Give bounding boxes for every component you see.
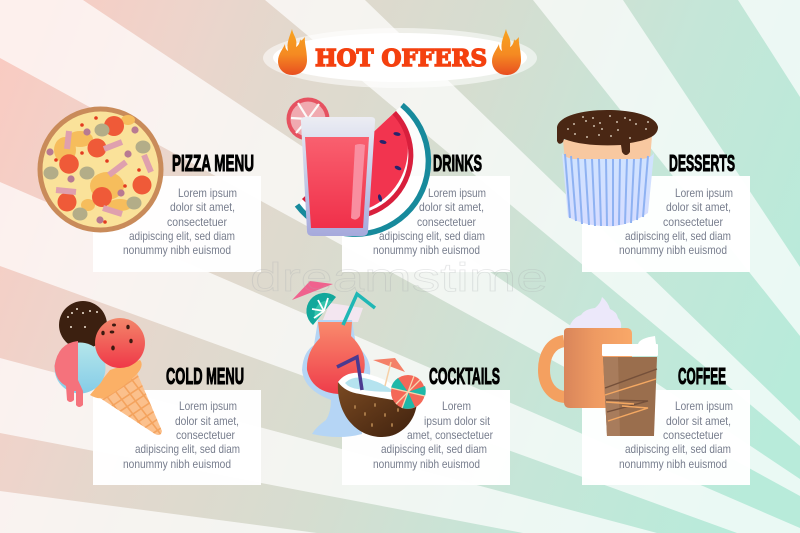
heading: COLD MENU	[166, 363, 244, 389]
icon: citrus slice	[286, 98, 330, 140]
body text: consectetuer	[167, 215, 227, 229]
body text: adipiscing elit, sed diam	[381, 442, 487, 456]
icon: right flame	[492, 29, 521, 75]
heading: DRINKS	[433, 150, 482, 176]
panel: drinks	[286, 98, 510, 272]
paper umbrella	[292, 281, 333, 300]
body text	[619, 399, 733, 471]
heading: COCKTAILS	[429, 363, 500, 389]
body text: Lorem ipsum	[675, 399, 733, 413]
body text: Lorem ipsum	[178, 186, 237, 200]
panel: pizza menu	[38, 106, 261, 272]
body text: dolor sit amet,	[170, 200, 235, 214]
body text: ipsum dolor sit	[424, 414, 491, 428]
icon: watermelon	[297, 105, 428, 234]
body text: nonummy nibh euismod	[619, 243, 727, 257]
heading text: HOT OFFERS	[315, 45, 487, 72]
text card	[582, 390, 750, 485]
body text	[373, 399, 493, 471]
icon: pizza	[38, 106, 164, 232]
icon: cocktail glass	[292, 281, 375, 437]
text card	[342, 390, 510, 485]
heading: COFFEE	[678, 363, 726, 389]
icon: ice cream cone	[54, 301, 162, 435]
text card	[582, 176, 750, 272]
body text: dolor sit amet,	[175, 414, 239, 428]
body text: consectetuer	[663, 428, 723, 442]
icon: glass of juice	[301, 117, 375, 236]
wheel umbrella	[391, 375, 426, 409]
body text	[619, 186, 733, 257]
heading: PIZZA MENU	[172, 150, 254, 176]
panel: coffee	[544, 297, 750, 485]
watermark: dreamstime	[250, 256, 548, 300]
body text: nonummy nibh euismod	[123, 243, 231, 257]
body text: adipiscing elit, sed diam	[129, 229, 235, 243]
body text: Lorem ipsum	[179, 399, 237, 413]
small umbrella	[373, 358, 405, 372]
body text: Lorem ipsum	[428, 186, 486, 200]
body text	[123, 399, 240, 471]
title: hot offers banner	[263, 28, 537, 88]
text card	[93, 176, 261, 272]
body text: consectetuer	[663, 215, 723, 229]
text card	[342, 176, 510, 272]
heading: DESSERTS	[669, 150, 735, 176]
body text: adipiscing elit, sed diam	[379, 229, 485, 243]
icon: coconut	[337, 357, 426, 437]
body text	[373, 186, 486, 257]
icon: left flame	[278, 29, 307, 75]
icon: takeaway coffee cup	[602, 336, 658, 436]
body text: adipiscing elit, sed diam	[135, 442, 240, 456]
body text: consectetuer	[176, 428, 235, 442]
panel: cold menu	[54, 301, 261, 485]
icon: mug with whipped cream	[544, 297, 632, 408]
body text: adipiscing elit, sed diam	[625, 229, 731, 243]
panel: cocktails	[292, 281, 510, 485]
text card	[93, 390, 261, 485]
body text: dolor sit amet,	[666, 414, 731, 428]
body text: dolor sit amet,	[419, 200, 484, 214]
icon: cupcake	[557, 110, 658, 226]
body text: Lorem ipsum	[675, 186, 733, 200]
panel: desserts	[557, 110, 750, 272]
body text: Lorem	[442, 399, 471, 413]
body text: nonummy nibh euismod	[619, 457, 727, 471]
body text: nonummy nibh euismod	[373, 457, 480, 471]
body text: amet, consectetuer	[407, 428, 493, 442]
body text: dolor sit amet,	[666, 200, 731, 214]
lime slice	[306, 293, 336, 325]
body text: nonummy nibh euismod	[123, 457, 231, 471]
body text	[123, 186, 237, 257]
body text: consectetuer	[417, 215, 476, 229]
body text: nonummy nibh euismod	[373, 243, 480, 257]
body text: adipiscing elit, sed diam	[625, 442, 731, 456]
